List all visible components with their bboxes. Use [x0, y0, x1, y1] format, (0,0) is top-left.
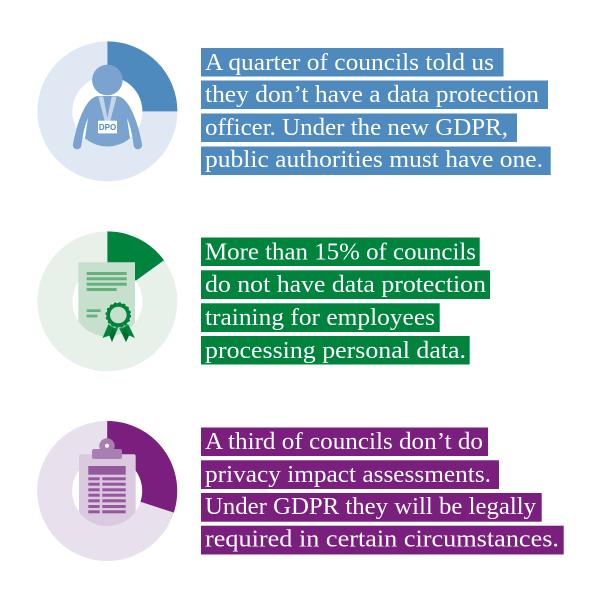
text block: privacy impact finding: Under GDPR they will be legally — [205, 493, 537, 520]
text block: data protection officer finding: officer. Under the new GDPR, — [205, 114, 508, 141]
icon: certificate with rosette — [78, 262, 135, 342]
donut chart: 15 percent — [55, 231, 164, 354]
text block: training finding: do not have data protection — [205, 271, 486, 298]
text block: data protection officer finding — [201, 48, 551, 175]
icon: clipboard with table — [79, 438, 136, 526]
icon: officer with badge: DPO — [99, 123, 116, 132]
text block: training finding — [201, 238, 490, 364]
text block: training finding: More than 15% of councils — [205, 238, 476, 266]
icon: officer with badge — [73, 65, 142, 149]
donut chart: a third — [55, 421, 177, 544]
text block: data protection officer finding: they don’t have a data protection — [205, 81, 539, 108]
panel: privacy impact assessments — [55, 421, 564, 554]
panel: data protection officer — [55, 41, 551, 175]
text block: privacy impact finding — [201, 428, 564, 554]
text block: data protection officer finding: A quarter of councils told us — [205, 49, 494, 76]
text block: privacy impact finding: privacy impact assessments. — [205, 461, 491, 488]
text block: privacy impact finding: A third of councils don’t do — [205, 428, 483, 455]
panel: data protection training — [55, 231, 490, 364]
text block: privacy impact finding: required in certain circumstances. — [205, 526, 559, 552]
donut chart: a quarter — [55, 41, 177, 164]
text block: training finding: training for employees — [205, 304, 435, 331]
text block: data protection officer finding: public authorities must have one. — [205, 146, 543, 173]
text block: training finding: processing personal data. — [205, 337, 466, 364]
